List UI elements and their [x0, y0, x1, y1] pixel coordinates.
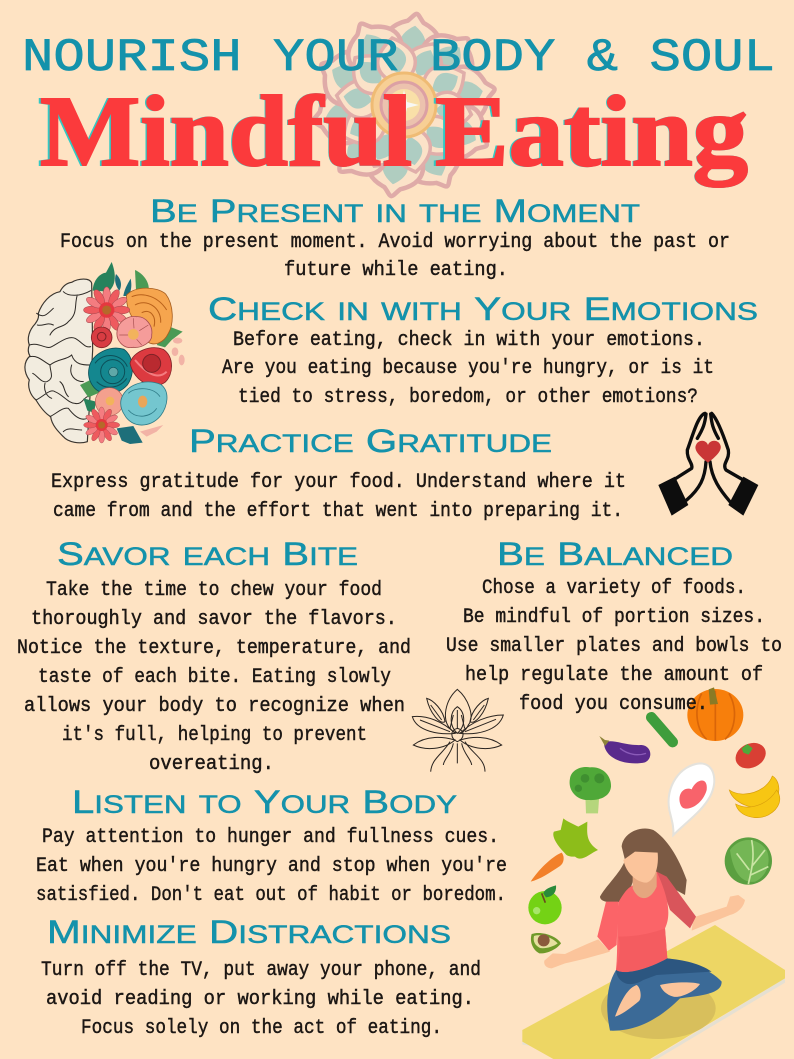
panel: listen to your body: Listen to Your Body	[72, 782, 457, 821]
legs	[607, 958, 722, 1031]
icon: carrot and leaves	[531, 818, 598, 882]
panel: minimize distractions: Minimize Distractions	[47, 912, 451, 951]
panel: be balanced: food you consume.	[519, 693, 708, 716]
panel: be present: Focus on the present moment. Avoid worrying about the past or	[60, 231, 730, 254]
panel: be present	[60, 191, 730, 282]
panel: be balanced: Be Balanced	[497, 534, 733, 573]
torso shade	[616, 928, 667, 977]
panel: savor each bite	[17, 534, 411, 776]
neck	[633, 872, 657, 898]
red rose	[130, 348, 172, 386]
icon: pumpkin	[687, 687, 743, 741]
subtitle: NOURISH YOUR BODY & SOUL	[22, 32, 775, 84]
panel: be balanced: Chose a variety of foods.	[482, 577, 746, 600]
panel: minimize distractions	[41, 912, 481, 1040]
red daisy bottom	[84, 407, 120, 443]
small red flower	[91, 327, 112, 348]
panel: check in with emotions	[208, 289, 758, 409]
panel: savor each bite: allows your body to recognize when	[24, 695, 405, 718]
left cuff	[658, 477, 688, 516]
panel: be balanced: Be mindful of portion sizes.	[463, 606, 765, 629]
illustration: brain with flowers	[25, 262, 185, 444]
panel: practice gratitude: Express gratitude for your food. Understand where it	[51, 471, 626, 494]
brain left hemisphere	[25, 279, 93, 443]
face	[623, 852, 658, 883]
teal flower	[89, 348, 132, 394]
title	[38, 75, 748, 187]
panel: minimize distractions: Focus solely on the act of eating.	[81, 1017, 442, 1040]
heart	[695, 441, 721, 463]
panel: savor each bite: overeating.	[149, 753, 274, 776]
feet	[660, 982, 700, 997]
panel: check in with emotions: Are you eating because you're hungry, or is it	[222, 357, 714, 380]
icon: banana	[729, 776, 780, 818]
panel: savor each bite: it's full, helping to prevent	[62, 724, 367, 747]
title: Mindful	[38, 75, 412, 187]
panel: check in with emotions: Before eating, check in with your emotions.	[233, 329, 705, 352]
pink sprigs	[140, 338, 185, 437]
panel: be balanced: help regulate the amount of	[465, 664, 763, 687]
panel: listen to your body	[36, 782, 507, 907]
panel: practice gratitude: Practice Gratitude	[189, 421, 552, 460]
icon: broccoli	[570, 767, 611, 813]
panel: listen to your body: Pay attention to hunger and fullness cues.	[42, 826, 499, 849]
panel: practice gratitude: came from and the effort that went into preparing it.	[53, 500, 623, 523]
torso	[616, 872, 668, 977]
panel: savor each bite: Take the time to chew your food	[46, 579, 382, 602]
icon: eggplant	[599, 736, 650, 763]
panel: be present: future while eating.	[284, 259, 508, 282]
panel: practice gratitude	[51, 421, 626, 523]
icon: avocado	[531, 933, 561, 953]
title: Eating	[433, 75, 748, 187]
icon: cucumber	[651, 717, 673, 742]
orange flower	[127, 288, 172, 344]
panel: minimize distractions: avoid reading or working while eating.	[46, 988, 474, 1011]
panel: savor each bite: taste of each bite. Eating slowly	[38, 666, 391, 689]
icon: cabbage	[725, 837, 772, 885]
panel: savor each bite: Savor each Bite	[57, 534, 358, 573]
panel: listen to your body: satisfied. Don't eat out of habit or boredom.	[36, 884, 506, 907]
panel: check in with emotions: Check in with Your Emotions	[208, 289, 758, 328]
panel: listen to your body: Eat when you're hungry and stop when you're	[36, 855, 507, 878]
mat shadow	[601, 978, 716, 1039]
icon: tomato	[731, 738, 770, 773]
pink small flower	[95, 388, 123, 416]
panel: savor each bite: thoroughly and savor the flavors.	[31, 608, 397, 631]
light blue flower	[121, 382, 167, 425]
icon: apple	[528, 885, 562, 924]
leaves	[80, 262, 183, 444]
panel: be present: Be Present in the Moment	[150, 191, 640, 230]
left arm	[544, 939, 610, 968]
panel: check in with emotions: tied to stress, boredom, or other emotions?	[238, 386, 698, 409]
title: Mindful	[40, 75, 412, 187]
panel: be balanced	[446, 534, 782, 716]
pink flower	[117, 316, 152, 348]
icon: speech bubble heart	[669, 763, 714, 835]
title: Eating	[435, 75, 748, 187]
icon: mandala	[309, 10, 499, 200]
sleeves	[597, 902, 618, 951]
icon: praying hands with heart	[658, 413, 758, 516]
panel: minimize distractions: Turn off the TV, put away your phone, and	[41, 959, 481, 982]
icon: yoga mat	[522, 925, 785, 1059]
illustration: woman with vegetables	[522, 687, 785, 1059]
right cuff	[728, 477, 758, 516]
icon: lotus line drawing	[412, 689, 503, 772]
woman figure	[544, 829, 745, 1031]
red daisy top	[84, 287, 130, 333]
hair back	[600, 829, 687, 902]
right arm	[692, 895, 745, 931]
panel: savor each bite: Notice the texture, temperature, and	[17, 637, 411, 660]
